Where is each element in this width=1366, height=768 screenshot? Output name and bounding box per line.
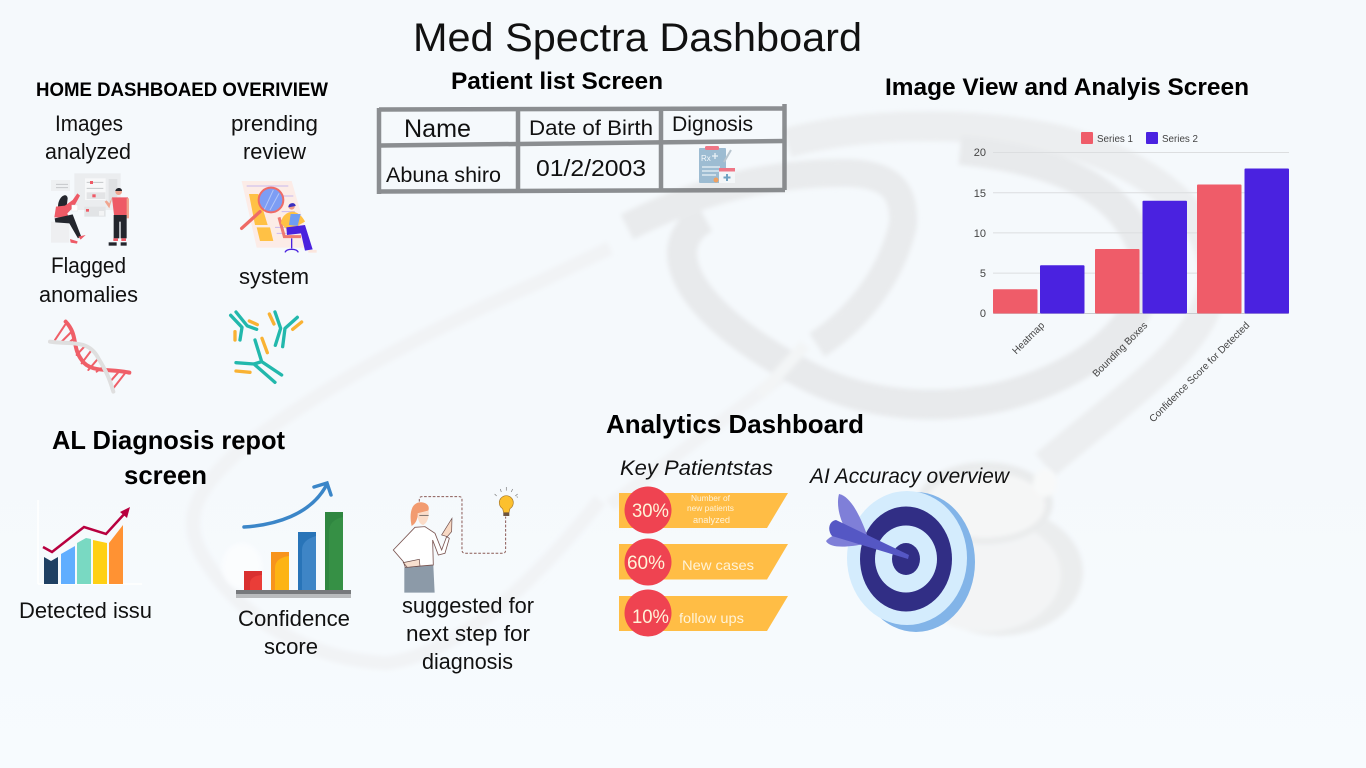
title: Med Spectra Dashboard xyxy=(413,16,862,60)
bar chart xyxy=(974,132,1289,425)
label: next step suggestion: suggested for xyxy=(402,593,534,618)
icon: DNA helix xyxy=(50,322,129,392)
table xyxy=(378,104,785,194)
label: images analyzed: Images xyxy=(55,111,123,136)
heading: image view and analysis screen: Image View and Analyis Screen xyxy=(885,74,1249,101)
icon: two people at a dashboard xyxy=(51,173,129,246)
label: next step suggestion xyxy=(402,593,534,674)
subheading: key patient stats: Key Patientstas xyxy=(620,457,774,480)
stat: 60% new cases: New cases xyxy=(682,557,754,573)
bar chart: Heatmap xyxy=(1011,320,1047,357)
stat: 30% patients analyzed xyxy=(619,486,788,534)
icon: prescription clipboard xyxy=(699,146,735,183)
chart legend xyxy=(1081,132,1198,145)
label: system: system xyxy=(239,264,309,289)
label: confidence score: Confidence xyxy=(238,606,350,631)
table: 01/2/2003 xyxy=(536,155,646,181)
table: Dignosis xyxy=(672,112,753,136)
stat: 10% follow ups: follow ups xyxy=(679,610,744,626)
panel: home dashboard overview xyxy=(36,79,329,392)
stat: 60% new cases: 60% xyxy=(627,553,665,574)
stat: 30% patients analyzed: analyzed xyxy=(693,515,730,526)
bar chart: Confidence Score for Detected xyxy=(1148,320,1252,425)
label: next step suggestion: next step for xyxy=(406,621,530,646)
label: confidence score: score xyxy=(264,634,318,659)
heading: home dashboard overview: HOME DASHBOAED OVERIVIEW xyxy=(36,79,329,101)
icon: detected issues chart xyxy=(38,500,142,584)
label: pending review: review xyxy=(243,139,306,164)
icon: target with arrow xyxy=(826,491,975,632)
label: images analyzed: analyzed xyxy=(45,139,131,164)
table: Name xyxy=(404,115,471,143)
icon: reviewer with magnifying glass xyxy=(242,181,317,253)
heading: AI diagnosis report screen xyxy=(52,425,285,490)
bar chart: 0 xyxy=(980,308,986,320)
stat: 30% patients analyzed: new patients xyxy=(687,504,734,513)
icon: woman pointing at lightbulb xyxy=(393,487,518,593)
heading: patient list screen: Patient list Screen xyxy=(451,68,663,95)
stat: 10% follow ups xyxy=(619,590,788,636)
label: next step suggestion: diagnosis xyxy=(422,649,513,674)
label: flagged anomalies: Flagged xyxy=(51,253,126,278)
panel: image view and analysis screen xyxy=(885,74,1289,425)
panel: AI diagnosis report screen xyxy=(19,425,534,674)
icon: prescription clipboard: Rx xyxy=(701,154,711,163)
heading: analytics dashboard: Analytics Dashboard xyxy=(606,409,864,439)
chart legend: Series 2 xyxy=(1162,134,1198,145)
label: flagged anomalies: anomalies xyxy=(39,282,138,307)
subheading: AI accuracy overview: AI Accuracy overview xyxy=(808,465,1011,488)
label: pending review: prending xyxy=(231,111,318,136)
label: flagged anomalies xyxy=(39,253,138,307)
label: detected issues: Detected issu xyxy=(19,598,152,623)
bar chart: 10 xyxy=(974,228,986,240)
stat: 10% follow ups: 10% xyxy=(632,607,669,628)
icon: confidence bars with rising arrow xyxy=(236,483,351,598)
stat: 60% new cases xyxy=(619,538,788,586)
heading: AI diagnosis report screen: screen xyxy=(124,460,207,490)
panel: analytics dashboard xyxy=(606,409,1011,636)
bar chart: Bounding Boxes xyxy=(1091,320,1150,380)
bar chart: 20 xyxy=(974,147,986,159)
label: confidence score xyxy=(238,606,350,659)
heading: AI diagnosis report screen: AL Diagnosis repot xyxy=(52,425,285,455)
bar chart: 15 xyxy=(974,188,986,200)
icon: antibodies xyxy=(231,312,302,382)
panel: patient list screen xyxy=(378,68,785,194)
stat: 30% patients analyzed: Number of xyxy=(691,494,731,503)
label: pending review xyxy=(231,111,318,164)
label: images analyzed xyxy=(45,111,131,164)
chart legend: Series 1 xyxy=(1097,134,1133,145)
stat: 30% patients analyzed: 30% xyxy=(632,501,669,522)
table: Abuna shiro xyxy=(386,163,501,187)
table: Date of Birth xyxy=(529,116,653,140)
bar chart: 5 xyxy=(980,268,986,280)
